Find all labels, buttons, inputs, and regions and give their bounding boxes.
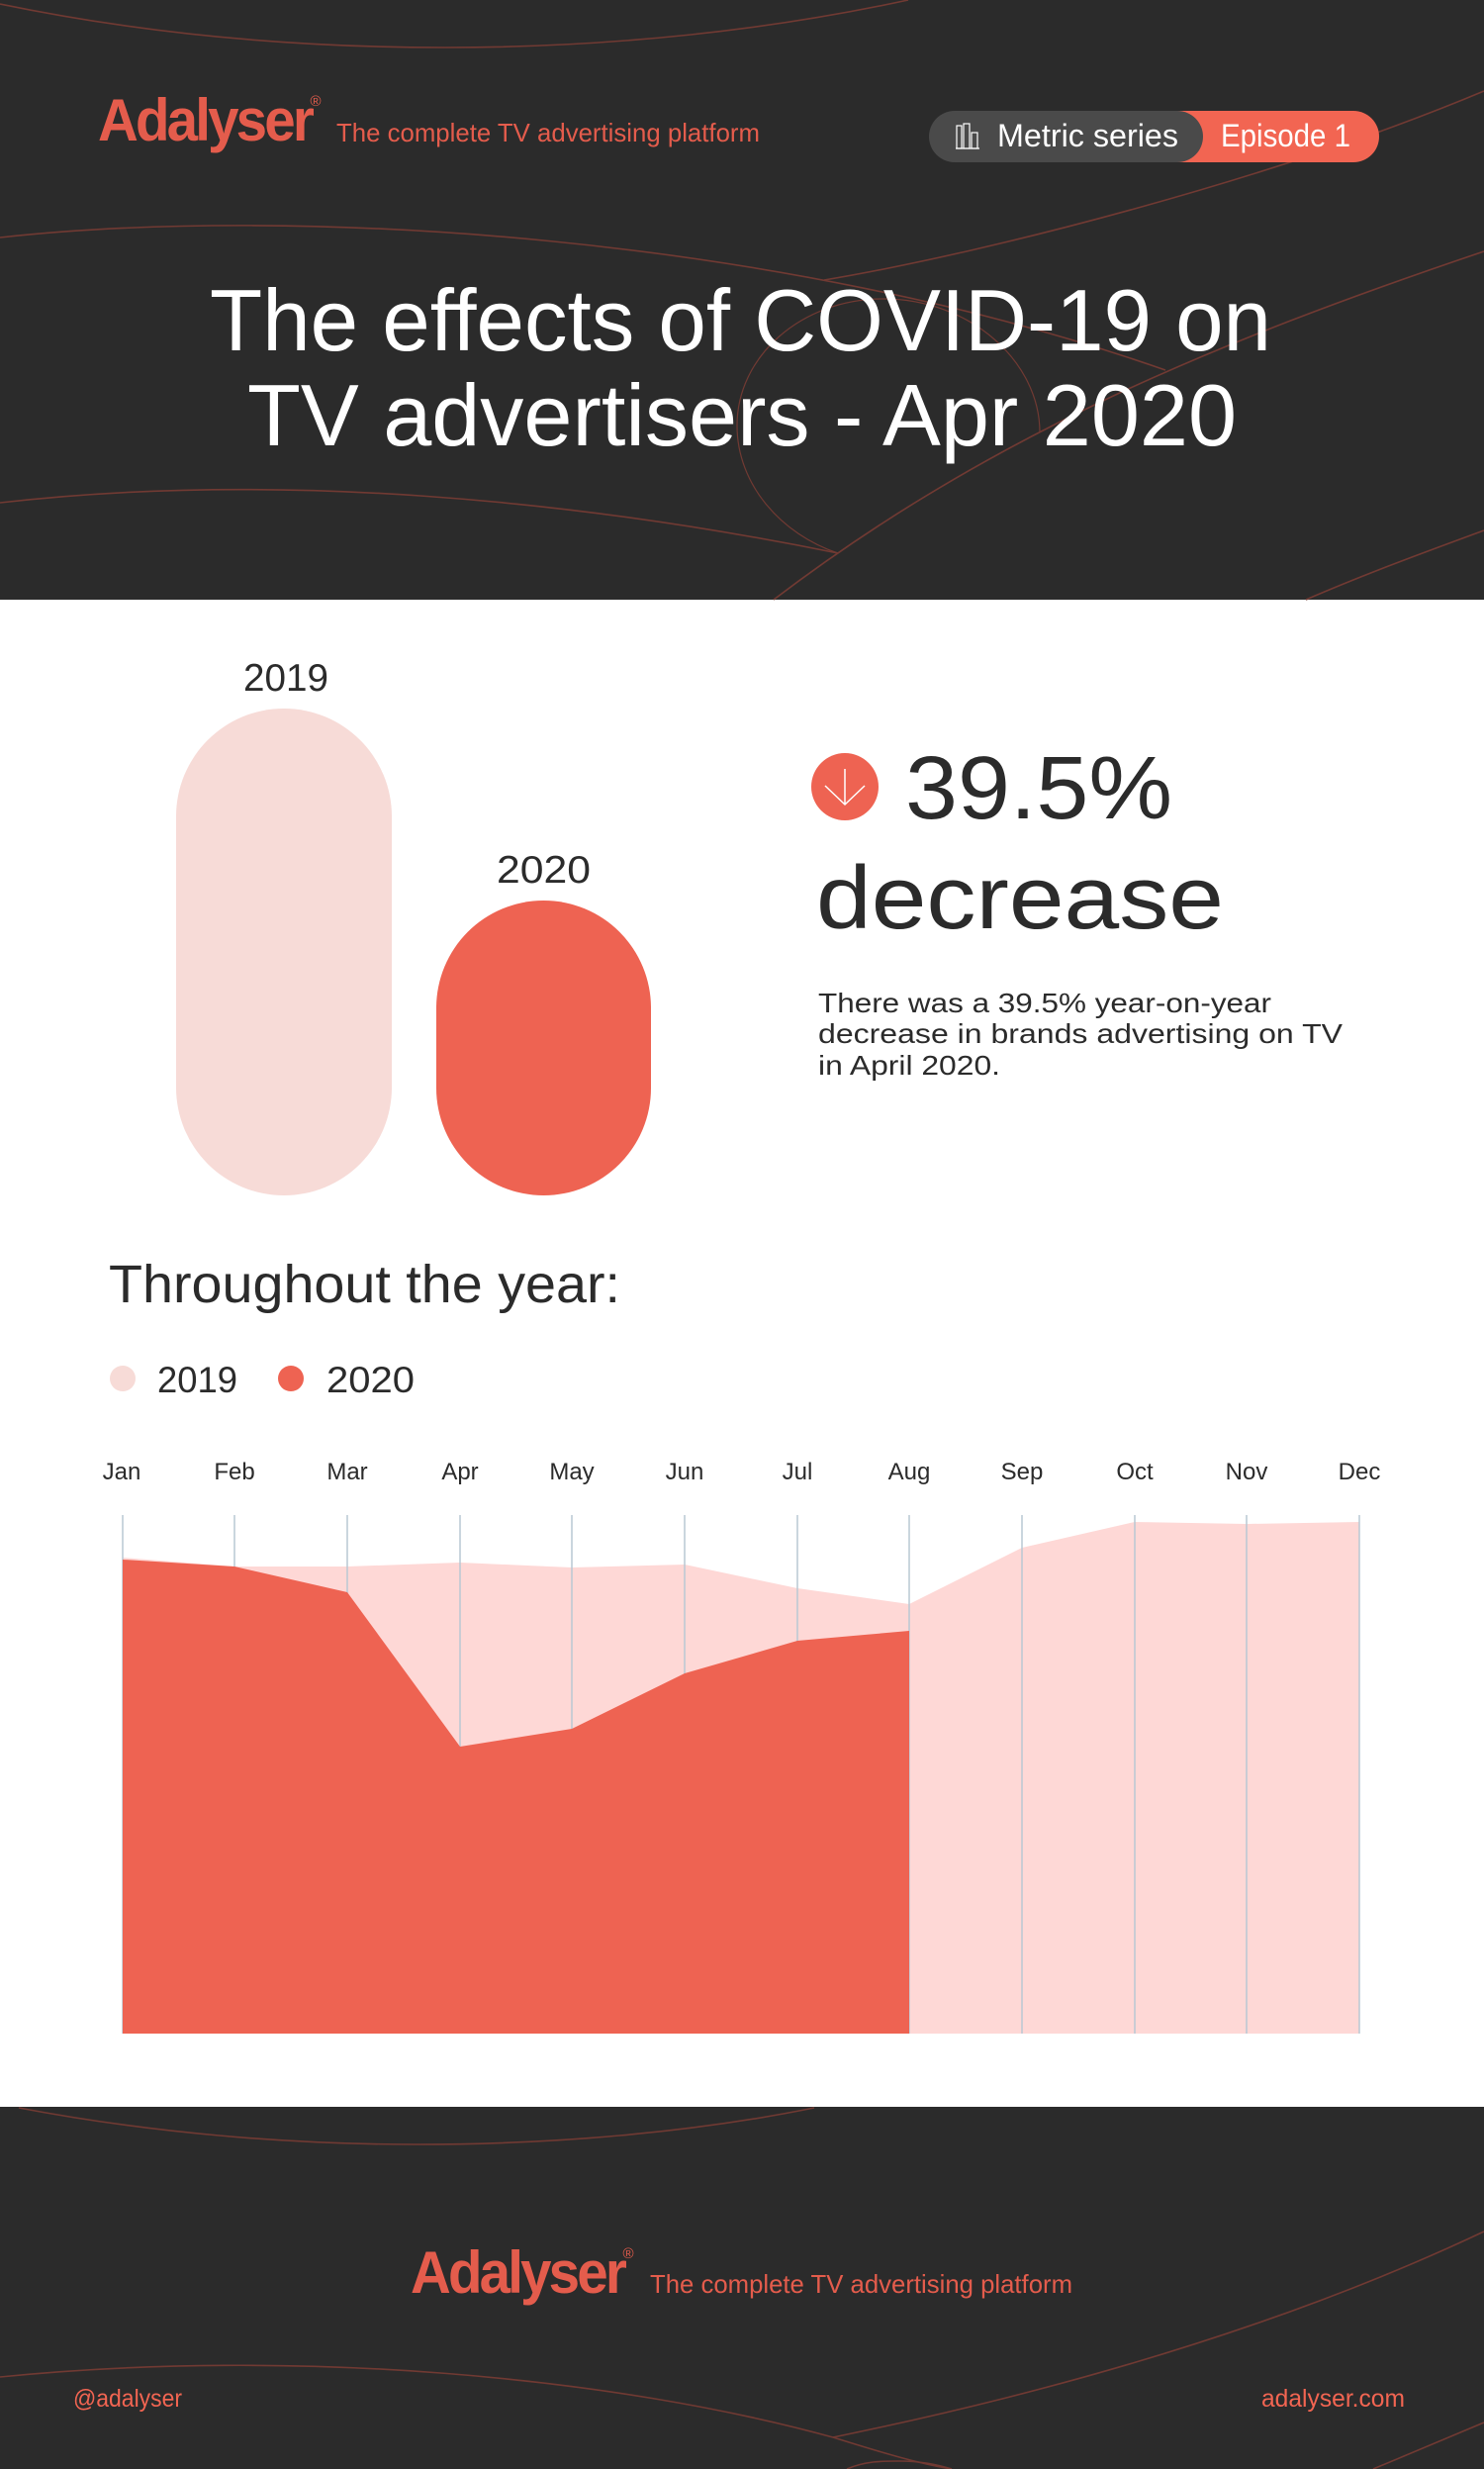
handle: @adalyser [73, 2385, 182, 2413]
area: 2019 [123, 1522, 1359, 2034]
heading: Throughout the year: Throughout the year: [109, 1255, 620, 1314]
bar: 2020 [436, 849, 651, 1195]
month labels: Mar [326, 1459, 368, 1485]
description text: decrease in brands advertising on TV [818, 1018, 1343, 1049]
month labels: Aug [888, 1459, 930, 1485]
title: TV advertisers - Apr 2020 [247, 366, 1237, 464]
month labels: Dec [1339, 1459, 1380, 1485]
month labels: Oct [1116, 1459, 1154, 1485]
logo: Adalyser footer: Adalyser [411, 2239, 626, 2306]
tagline: footer: The complete TV advertising platform [650, 2269, 1072, 2299]
panel: footer [0, 2107, 1484, 2469]
icon: bar chart [956, 124, 979, 148]
panel: year-on-year comparison [176, 657, 1343, 1195]
area: 2020 [123, 1560, 909, 2034]
month labels: May [549, 1459, 595, 1485]
month labels: Feb [214, 1459, 255, 1485]
month labels: Jan [103, 1459, 140, 1485]
title [210, 271, 1271, 464]
description text: in April 2020. [818, 1050, 1000, 1081]
badge label: Metric series: Metric series [997, 118, 1178, 153]
chart: monthly area chart [103, 1459, 1380, 2034]
stat: 39.5% decrease [816, 739, 1224, 948]
month labels: Apr [441, 1459, 479, 1485]
bar: 2020: 2020 [497, 849, 591, 892]
title: The effects of COVID-19 on [210, 271, 1271, 369]
bar: 2019 [176, 657, 392, 1195]
legend: 2020 [326, 1360, 415, 1400]
badge: Metric series Episode 1 [929, 111, 1379, 162]
month labels: Nov [1226, 1459, 1267, 1485]
stat: 39.5% decrease: 39.5% [905, 739, 1172, 838]
logo: Adalyser header: ® [310, 93, 322, 110]
panel: header [0, 0, 1484, 600]
badge label: Episode 1: Episode 1 [1221, 118, 1350, 153]
icon: down arrow [811, 753, 879, 820]
legend [110, 1360, 415, 1400]
logo: Adalyser footer: ® [622, 2245, 634, 2262]
tagline: header: The complete TV advertising platform [336, 118, 760, 147]
logo: Adalyser header: Adalyser [98, 87, 314, 153]
month labels: Jun [666, 1459, 703, 1485]
description text: There was a 39.5% year-on-year [818, 988, 1271, 1018]
stat: 39.5% decrease: decrease [816, 849, 1224, 948]
month labels: Sep [1001, 1459, 1043, 1485]
bar: 2019: 2019 [243, 657, 328, 700]
description text [818, 988, 1343, 1081]
legend: 2019 [157, 1360, 237, 1400]
website: adalyser.com [1261, 2385, 1405, 2413]
month labels [103, 1459, 1380, 1485]
month labels: Jul [783, 1459, 812, 1485]
